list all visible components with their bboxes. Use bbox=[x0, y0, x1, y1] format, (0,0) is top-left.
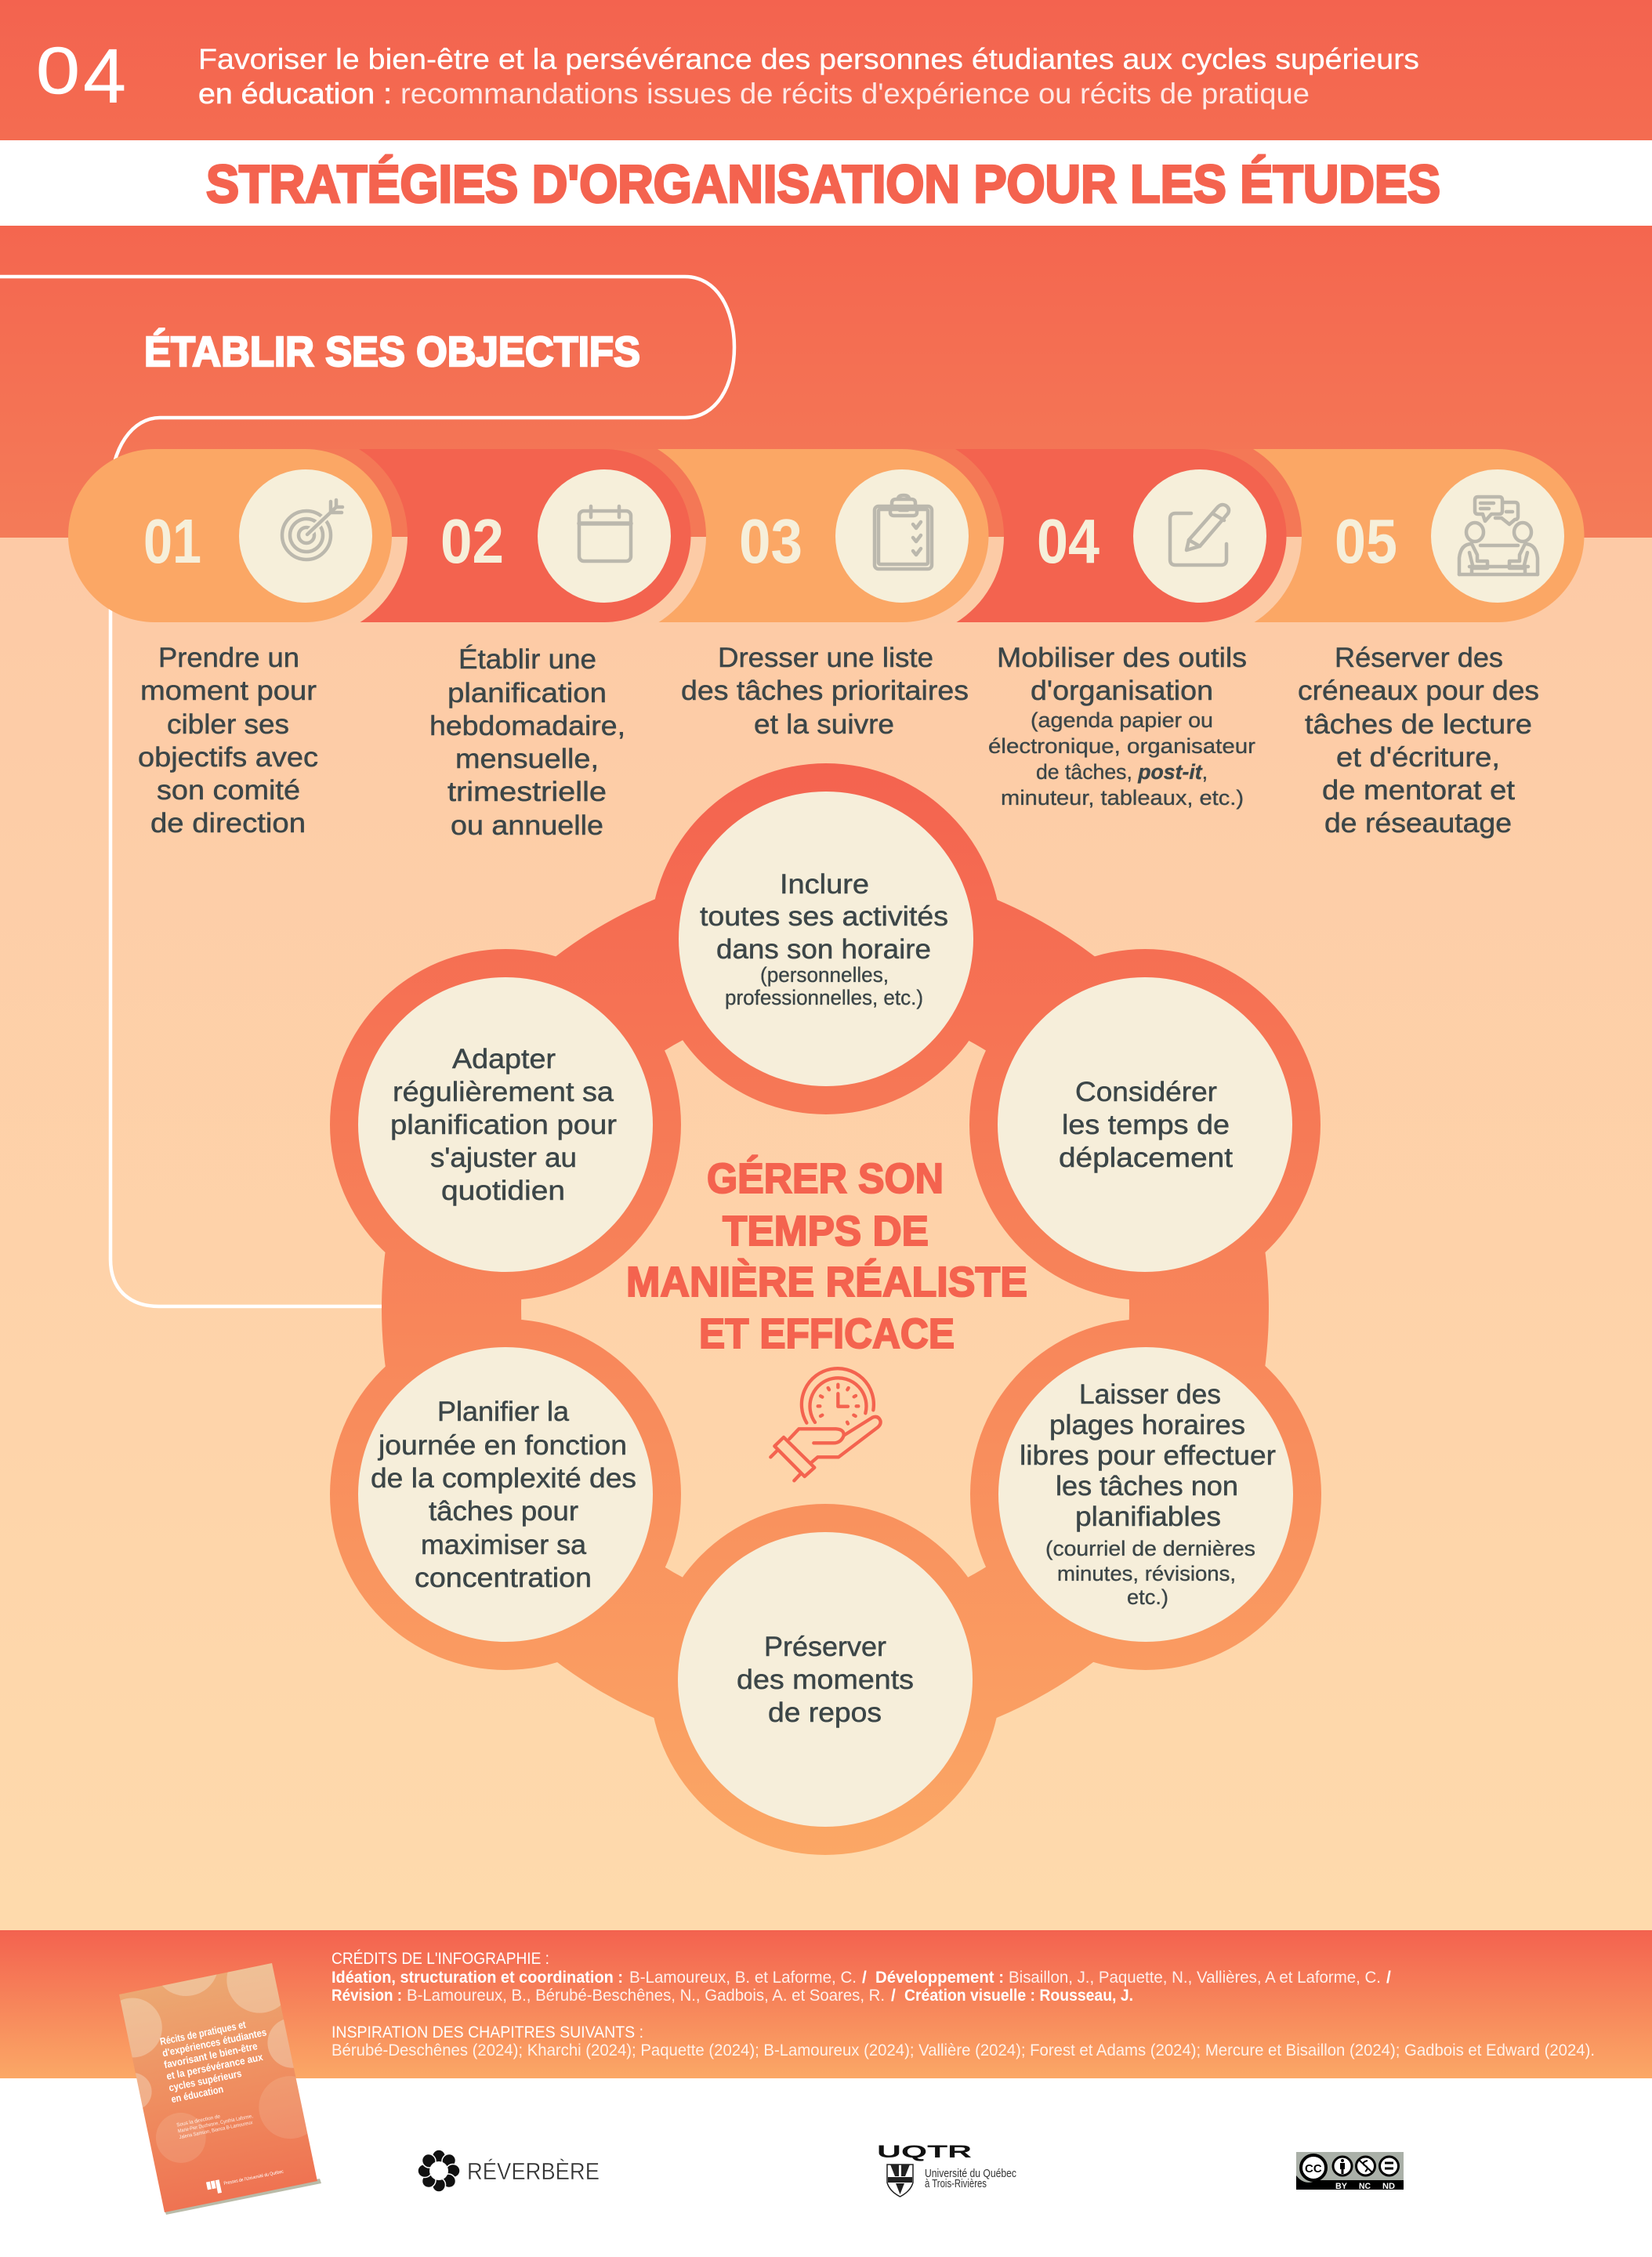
book cover: d'expériences étudiantes bbox=[161, 2026, 267, 2059]
step 3 pill: 03 bbox=[739, 506, 802, 576]
central heading: ET EFFICACE bbox=[699, 1310, 955, 1357]
step 4 text: Mobiliser des outils bbox=[997, 643, 1247, 673]
section heading: ÉTABLIR SES OBJECTIFS bbox=[144, 328, 640, 375]
step 4 text bbox=[988, 643, 1255, 810]
node: include activities: professionnelles, etc.) bbox=[725, 986, 923, 1009]
book cover: Jalena Samson, Bianca B-Lamoureux bbox=[179, 2120, 254, 2140]
node: adapt planning: régulièrement sa bbox=[393, 1077, 614, 1107]
icon: checklist clipboard bbox=[875, 495, 932, 569]
step 1 text: objectifs avec bbox=[138, 742, 318, 773]
step 4 text: électronique, organisateur bbox=[988, 734, 1255, 758]
step 2 text: ou annuelle bbox=[451, 810, 603, 841]
credits text: / bbox=[1386, 1969, 1391, 1987]
logo: UQTR: Université du Québec bbox=[925, 2168, 1016, 2180]
step 4 text: d'organisation bbox=[1031, 676, 1213, 706]
logo: UQTR bbox=[877, 2142, 1016, 2197]
node: free slots bbox=[998, 1347, 1293, 1642]
central heading bbox=[626, 1155, 1027, 1357]
credits text: / bbox=[862, 1969, 867, 1987]
step 2 pill bbox=[306, 449, 691, 622]
node: free slots: Laisser des bbox=[1079, 1379, 1221, 1410]
step 4 text: minuteur, tableaux, etc.) bbox=[1001, 786, 1244, 810]
node: plan the day: tâches pour bbox=[429, 1496, 578, 1527]
step 4 text: (agenda papier ou bbox=[1031, 708, 1213, 732]
node: preserve rest: Préserver bbox=[764, 1632, 886, 1662]
node: plan the day bbox=[358, 1347, 653, 1642]
step 5 text: et d'écriture, bbox=[1336, 742, 1500, 773]
step 5 text bbox=[1298, 643, 1539, 839]
cut-out ring behind step 1 bbox=[306, 449, 408, 623]
badge: Creative Commons BY-NC-ND bbox=[1296, 2152, 1404, 2191]
book cover: Récits de pratiques et bbox=[159, 2018, 247, 2048]
logo: UQTR: à Trois-Rivières bbox=[925, 2178, 987, 2190]
logo: Réverbère: RÉVERBÈRE bbox=[467, 2157, 600, 2185]
book cover: et la persévérance aux bbox=[165, 2051, 264, 2082]
step 2 text: hebdomadaire, bbox=[429, 711, 625, 741]
step 3 text: Dresser une liste bbox=[718, 643, 933, 673]
cut-out ring behind step 3 bbox=[902, 449, 1004, 623]
credits text: Bisaillon, J., Paquette, N., Vallières, A et Laforme, C. bbox=[1009, 1969, 1381, 1987]
book cover bbox=[119, 1963, 321, 2215]
node: include activities bbox=[679, 792, 973, 1086]
node: travel time: les temps de bbox=[1062, 1110, 1230, 1140]
title band bbox=[0, 140, 1652, 226]
book cover: en éducation bbox=[170, 2083, 224, 2105]
badge: Creative Commons BY-NC-ND: BY bbox=[1335, 2182, 1348, 2191]
credits text bbox=[331, 1950, 1595, 2060]
icon: people meeting bbox=[1459, 497, 1538, 574]
step 2 text: Établir une bbox=[458, 644, 596, 675]
step 2 text: planification bbox=[447, 678, 607, 708]
node: free slots: les tâches non bbox=[1056, 1471, 1238, 1502]
step 1 pill bbox=[68, 449, 392, 622]
step 2 text: mensuelle, bbox=[455, 744, 599, 774]
cut-out ring behind step 2 bbox=[604, 449, 706, 623]
node: free slots: plages horaires bbox=[1049, 1410, 1245, 1440]
header text: en éducation : bbox=[198, 78, 392, 110]
node: travel time: déplacement bbox=[1059, 1143, 1233, 1173]
central heading: MANIÈRE RÉALISTE bbox=[626, 1259, 1027, 1306]
step 3 text: et la suivre bbox=[754, 709, 894, 740]
chapter number: 0 bbox=[36, 34, 80, 107]
step 2 text: trimestrielle bbox=[447, 777, 607, 807]
step 5 text: créneaux pour des bbox=[1298, 676, 1539, 706]
node: plan the day: Planifier la bbox=[437, 1397, 570, 1427]
header text bbox=[198, 43, 1419, 110]
node: free slots: (courriel de dernières bbox=[1045, 1537, 1255, 1560]
credits text: B-Lamoureux, B., Bérubé-Beschênes, N., Gadbois, A. et Soares, R. bbox=[407, 1987, 885, 2005]
node: adapt planning: s'ajuster au bbox=[430, 1143, 577, 1173]
book cover: Sous la direction de bbox=[176, 2114, 221, 2128]
node: adapt planning: quotidien bbox=[441, 1176, 565, 1206]
step 1 text: moment pour bbox=[140, 676, 317, 706]
book cover: Presses de l'Université du Québec bbox=[223, 2170, 284, 2186]
icon: clock in hand bbox=[770, 1368, 881, 1480]
credits text: Idéation, structuration et coordination : bbox=[331, 1969, 623, 1987]
credits text: / bbox=[891, 1987, 896, 2005]
chapter number bbox=[36, 33, 126, 119]
credits text: Création visuelle : Rousseau, J. bbox=[904, 1987, 1133, 2005]
node: adapt planning bbox=[358, 977, 653, 1272]
node: preserve rest bbox=[678, 1532, 973, 1827]
central heading: GÉRER SON bbox=[707, 1155, 944, 1202]
central heading: TEMPS DE bbox=[723, 1208, 929, 1255]
step 1 text: Prendre un bbox=[158, 643, 299, 673]
credits text: Bérubé-Deschênes (2024); Kharchi (2024); Paquette (2024); B-Lamoureux (2024); Vallière (2024); Forest et Adams (2024); Mercure et Bisaillon (2024); Gadbois et Edward (2024). bbox=[331, 2041, 1595, 2060]
ring: connecting band and outer discs bbox=[330, 763, 1321, 1855]
node: include activities: (personnelles, bbox=[760, 963, 889, 987]
background: lower peach area bbox=[0, 538, 1652, 1930]
cut-out ring behind step 4 bbox=[1200, 449, 1302, 623]
step 5 text: de réseautage bbox=[1324, 808, 1512, 839]
node: plan the day: concentration bbox=[415, 1563, 592, 1593]
book cover: Marie-Pier Duchesne, Cynthia Laforme, bbox=[177, 2114, 254, 2134]
credits text: CRÉDITS DE L'INFOGRAPHIE : bbox=[331, 1950, 549, 1968]
node: free slots: minutes, révisions, bbox=[1057, 1562, 1236, 1585]
icon: target bbox=[282, 500, 342, 560]
node: include activities: Inclure bbox=[780, 869, 869, 900]
node: include activities: dans son horaire bbox=[716, 934, 931, 965]
badge: Creative Commons BY-NC-ND: NC bbox=[1359, 2182, 1371, 2191]
credits text: Développement : bbox=[875, 1969, 1004, 1987]
book cover: cycles supérieurs bbox=[168, 2067, 243, 2094]
footer white area bbox=[0, 2078, 1652, 2257]
credits text: INSPIRATION DES CHAPITRES SUIVANTS : bbox=[331, 2023, 643, 2041]
icon: calendar bbox=[579, 506, 631, 561]
step 5 text: Réserver des bbox=[1335, 643, 1503, 673]
step 4 pill bbox=[902, 449, 1287, 622]
step 2 text bbox=[429, 644, 625, 841]
step 5 text: de mentorat et bbox=[1322, 775, 1515, 806]
white outline connecting section label to the ring bbox=[0, 277, 734, 1306]
chapter number: 4 bbox=[83, 33, 126, 119]
book cover: favorisant le bien-être bbox=[163, 2040, 259, 2070]
step 3 pill bbox=[604, 449, 989, 622]
title band: STRATÉGIES D'ORGANISATION POUR LES ÉTUDES bbox=[206, 154, 1440, 214]
header text: Favoriser le bien-être et la persévérance des personnes étudiantes aux cycles supérieurs bbox=[198, 43, 1419, 75]
node: travel time: Considérer bbox=[1075, 1077, 1217, 1107]
node: free slots: libres pour effectuer bbox=[1020, 1440, 1276, 1471]
logo: UQTR: UQTR bbox=[877, 2142, 972, 2161]
logo: Réverbère bbox=[418, 2150, 600, 2192]
step 5 pill: 05 bbox=[1335, 506, 1397, 576]
step 3 text bbox=[681, 643, 969, 740]
step 1 text: son comité bbox=[157, 775, 300, 806]
step 1 text bbox=[138, 643, 318, 839]
step 1 text: cibler ses bbox=[167, 709, 289, 740]
step 5 text: tâches de lecture bbox=[1305, 709, 1532, 740]
step 5 pill bbox=[1200, 449, 1585, 622]
node: plan the day: maximiser sa bbox=[421, 1530, 587, 1560]
ring diagram bbox=[330, 763, 1321, 1855]
step 1 text: de direction bbox=[150, 808, 306, 839]
step 4 pill: 04 bbox=[1037, 506, 1100, 576]
footer band bbox=[0, 1930, 1652, 2078]
node: adapt planning: Adapter bbox=[452, 1044, 556, 1074]
step 3 text: des tâches prioritaires bbox=[681, 676, 969, 706]
step 1 pill: 01 bbox=[143, 506, 201, 576]
node: free slots: etc.) bbox=[1127, 1585, 1168, 1609]
header text: recommandations issues de récits d'expérience ou récits de pratique bbox=[400, 78, 1310, 110]
icon: pencil and note bbox=[1170, 505, 1229, 565]
step 4 text: de tâches, post-it, bbox=[1036, 760, 1208, 784]
credits text: Révision : bbox=[331, 1987, 402, 2005]
node: travel time bbox=[998, 977, 1292, 1272]
badge: Creative Commons BY-NC-ND: CC bbox=[1305, 2162, 1322, 2175]
step 2 pill: 02 bbox=[440, 506, 504, 576]
node: preserve rest: de repos bbox=[768, 1697, 882, 1728]
node: free slots: planifiables bbox=[1075, 1502, 1221, 1532]
node: adapt planning: planification pour bbox=[390, 1110, 617, 1140]
node: plan the day: de la complexité des bbox=[371, 1463, 636, 1494]
header band bbox=[0, 0, 1652, 140]
background: upper coral band bbox=[0, 226, 1652, 538]
badge: Creative Commons BY-NC-ND: ND bbox=[1382, 2182, 1395, 2191]
node: preserve rest: des moments bbox=[737, 1665, 914, 1695]
node: plan the day: journée en fonction bbox=[378, 1430, 627, 1461]
credits text: B-Lamoureux, B. et Laforme, C. bbox=[629, 1969, 857, 1987]
node: include activities: toutes ses activités bbox=[700, 901, 948, 932]
